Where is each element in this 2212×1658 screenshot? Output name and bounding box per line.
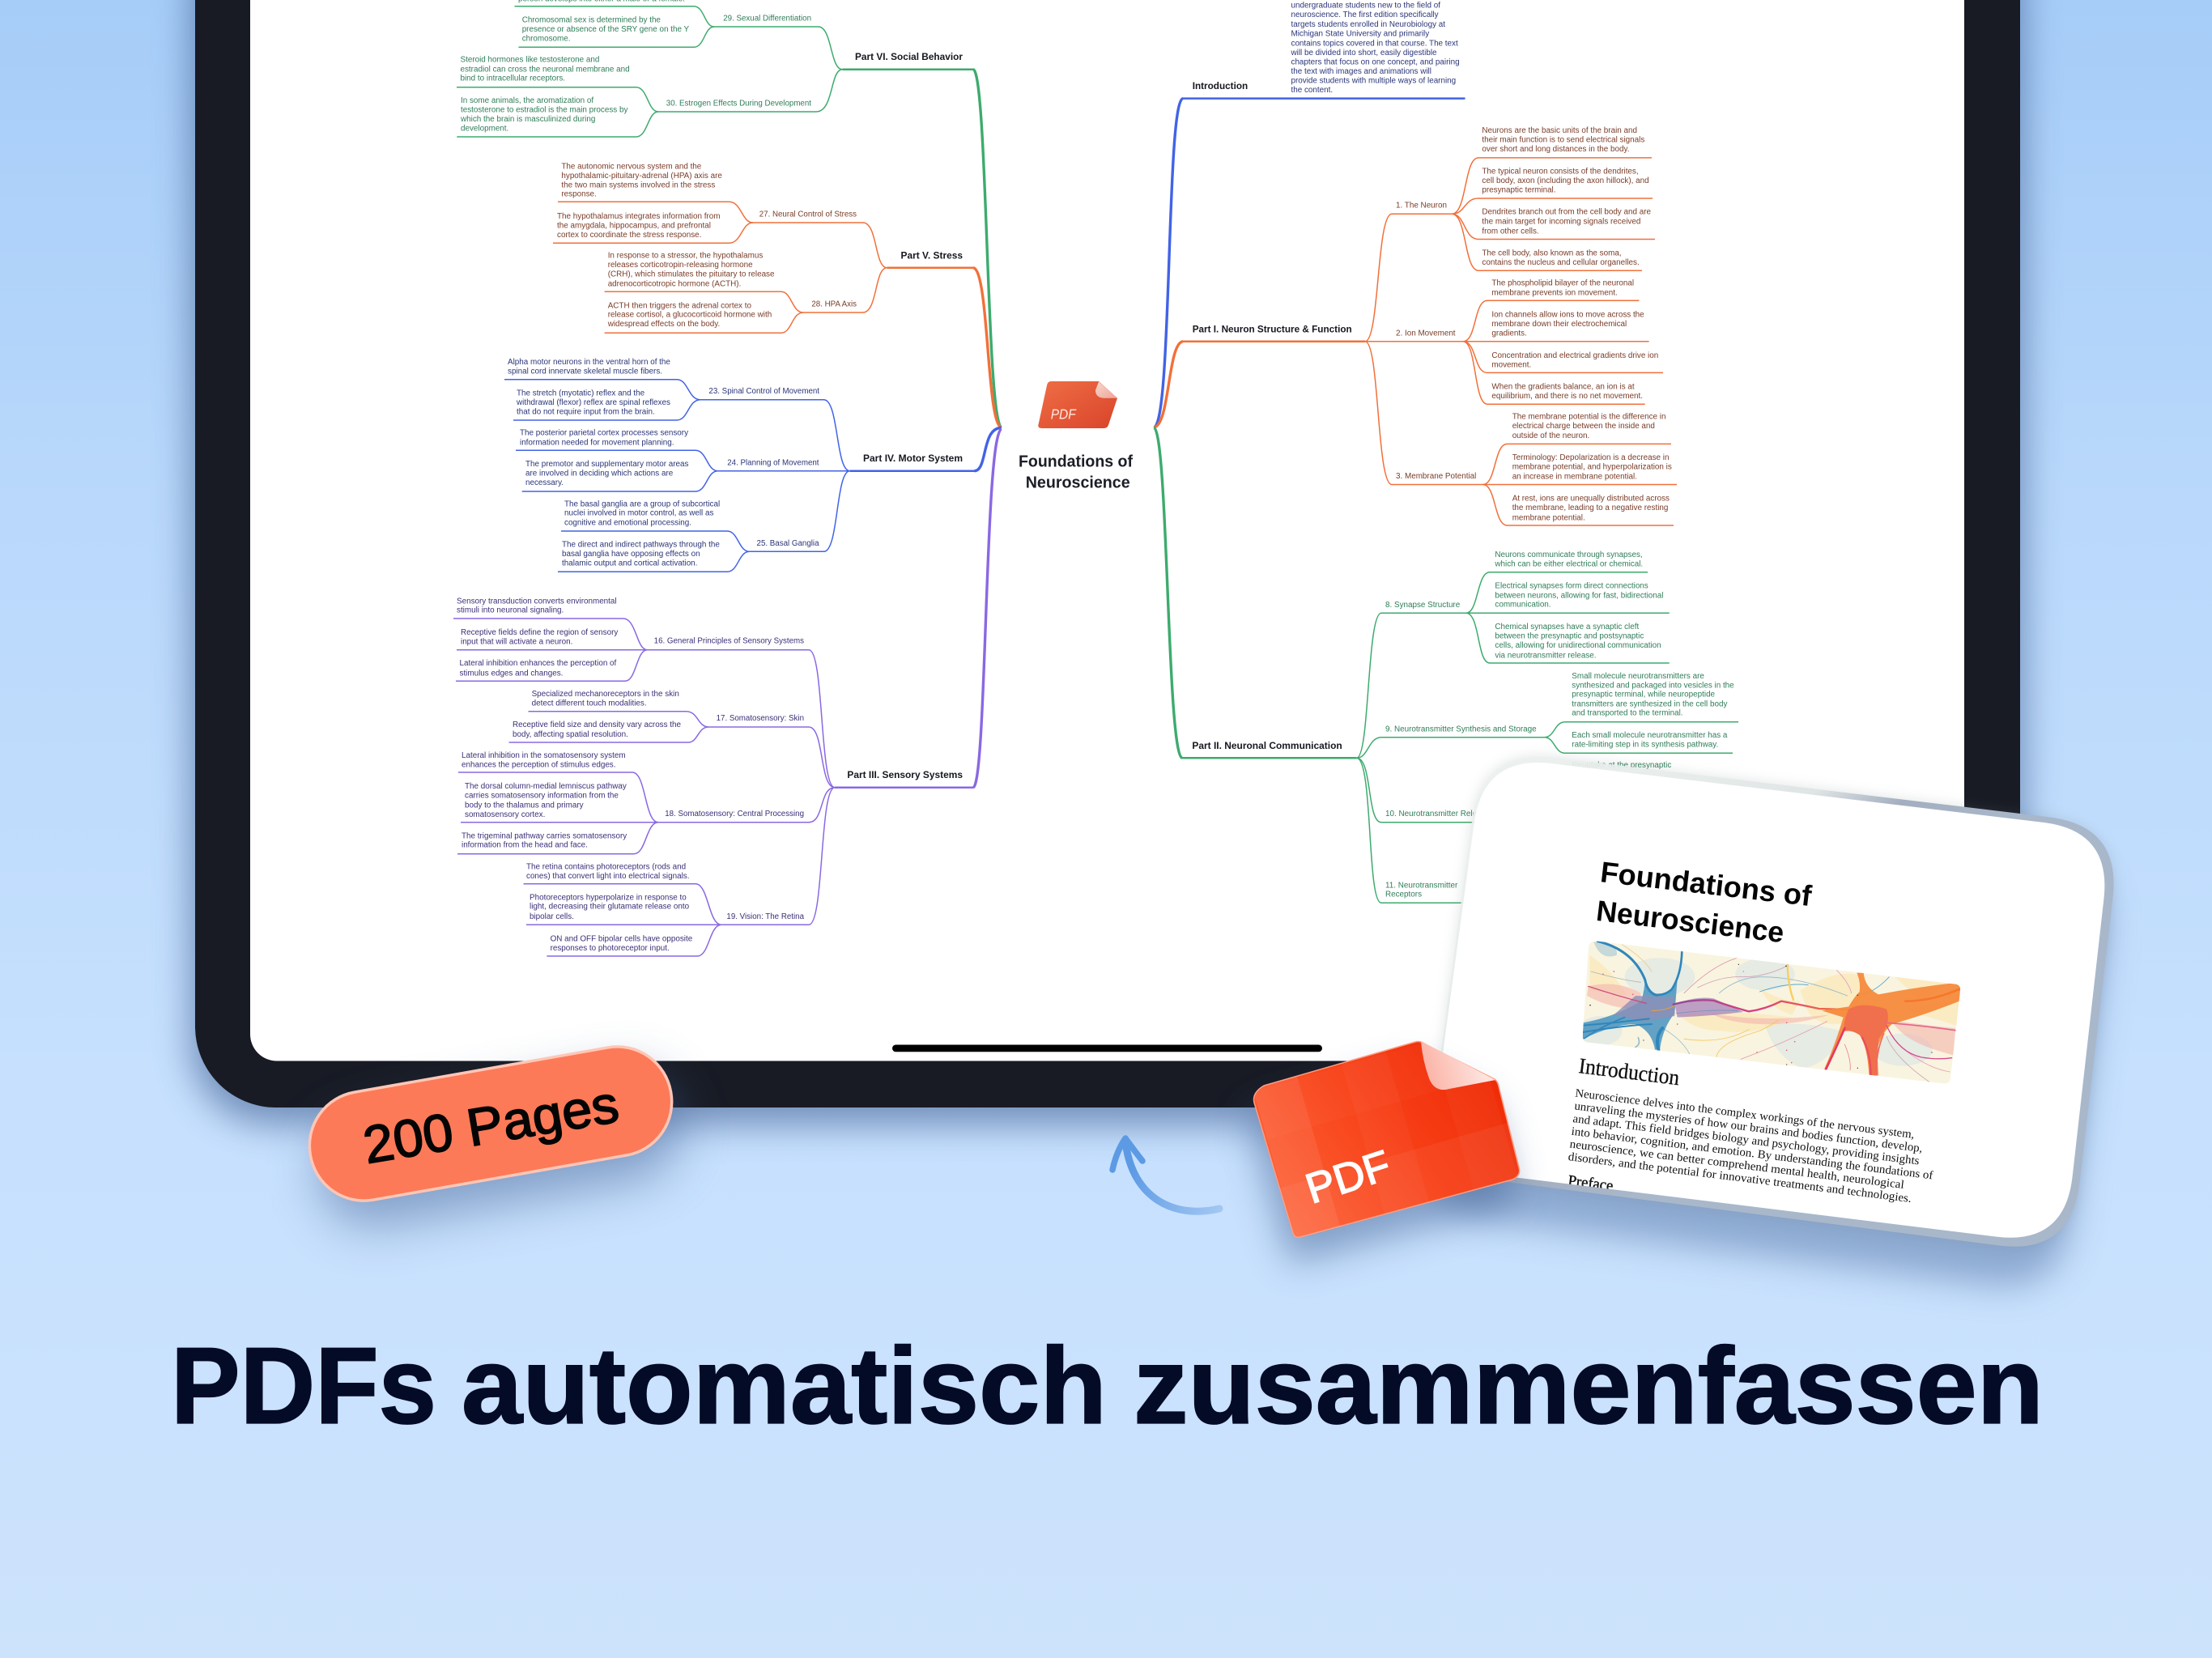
node: 1. The Neuron: Dendrites branch out from the cell body and are [1482, 208, 1651, 217]
folded corner [1421, 1041, 1495, 1090]
node: 2. Ion Movement: gradients. [1491, 329, 1527, 338]
PDF document card [1434, 757, 2114, 1247]
node: 1. The Neuron: over short and long distances in the body. [1482, 145, 1629, 154]
central topic [1019, 381, 1133, 491]
branch: Introduction: Introduction [1193, 80, 1248, 91]
node: 8. Synapse Structure [1357, 551, 1670, 758]
node: 8. Synapse Structure: Neurons communicate through synapses, [1495, 551, 1643, 559]
branch: Introduction: the content. [1291, 86, 1333, 95]
node: 2. Ion Movement: membrane prevents ion movement. [1491, 288, 1618, 298]
node: 24. Planning of Movement: 24. Planning of Movement [727, 458, 819, 467]
node: 2. Ion Movement: The phospholipid bilayer of the neuronal [1491, 279, 1634, 288]
node: 3. Membrane Potential: 3. Membrane Potential [1396, 472, 1476, 481]
node: 16. General Principles of Sensory Systems: stimuli into neuronal signaling. [457, 606, 564, 615]
node: 28. HPA Axis: 28. HPA Axis [811, 300, 857, 309]
node: 25. Basal Ganglia: thalamic output and cortical activation. [562, 559, 697, 568]
node: 25. Basal Ganglia: 25. Basal Ganglia [757, 539, 819, 548]
node: 9. Neurotransmitter Synthesis and Storage: and transported to the terminal. [1572, 709, 1683, 718]
node: 17. Somatosensory: Skin: detect different touch modalities. [532, 699, 647, 708]
card face [1436, 763, 2104, 1238]
node: 18. Somatosensory: Central Processing: The dorsal column-medial lemniscus pathway [465, 782, 627, 791]
node: 19. Vision: The Retina: Photoreceptors hyperpolarize in response to [530, 893, 687, 902]
node: 19. Vision: The Retina: 19. Vision: The Retina [726, 912, 805, 921]
node: 18. Somatosensory: Central Processing: The trigeminal pathway carries somatosensory [462, 831, 627, 840]
node: 27. Neural Control of Stress: hypothalamic-pituitary-adrenal (HPA) axis are [561, 172, 722, 181]
card body text [1567, 1087, 1938, 1208]
node: 16. General Principles of Sensory Systems: Receptive fields define the region of sensory [461, 628, 618, 637]
node: 1. The Neuron: contains the nucleus and cellular organelles. [1482, 258, 1640, 267]
node: 1. The Neuron: their main function is to send electrical signals [1482, 136, 1644, 144]
node: 8. Synapse Structure: communication. [1495, 601, 1551, 610]
mind map [453, 0, 1738, 956]
node: 23. Spinal Control of Movement: Alpha motor neurons in the ventral horn of the [508, 358, 670, 367]
central title [1019, 453, 1133, 491]
card body text: Neuroscience delves into the complex workings of the nervous system, [1575, 1087, 1915, 1141]
node: 30. Estrogen Effects During Development: development. [461, 124, 508, 133]
node: 8. Synapse Structure: via neurotransmitter release. [1495, 651, 1597, 660]
node: 3. Membrane Potential: The membrane potential is the difference in [1512, 413, 1665, 422]
badge: 200 Pages [301, 1038, 688, 1235]
node: 18. Somatosensory: Central Processing: information from the head and face. [462, 841, 588, 850]
tablet frame [195, 0, 2020, 1107]
node: 30. Estrogen Effects During Development: which the brain is masculinized during [460, 115, 595, 124]
node: 23. Spinal Control of Movement: spinal cord innervate skeletal muscle fibers. [508, 367, 662, 376]
node: 8. Synapse Structure: 8. Synapse Structure [1385, 601, 1461, 610]
node: 29. Sexual Differentiation: chromosome. [522, 34, 571, 44]
branch: Part II. Neuronal Communication [1154, 427, 1738, 903]
card illustration: neurons [1582, 941, 1961, 1083]
node: 1. The Neuron: from other cells. [1482, 227, 1539, 236]
node: 18. Somatosensory: Central Processing [457, 751, 835, 854]
branch: Introduction: contains topics covered in that course. The text [1291, 39, 1458, 48]
node: 16. General Principles of Sensory Systems: input that will activate a neuron. [461, 638, 572, 647]
node: 9. Neurotransmitter Synthesis and Storage: Small molecule neurotransmitters are [1572, 672, 1704, 681]
card body text: and adapt. This field bridges biology and psychology, providing insights [1572, 1112, 1921, 1168]
node: 24. Planning of Movement: information needed for movement planning. [520, 438, 674, 447]
node: 23. Spinal Control of Movement: withdrawal (flexor) reflex are spinal reflexes [516, 398, 670, 407]
card shadow below [1431, 889, 2121, 1304]
branch: Introduction: provide students with multiple ways of learning [1291, 76, 1456, 85]
node: 24. Planning of Movement: The posterior parietal cortex processes sensory [520, 428, 688, 437]
node: 18. Somatosensory: Central Processing: enhances the perception of stimulus edges. [462, 760, 615, 769]
node: 27. Neural Control of Stress: The autonomic nervous system and the [561, 162, 702, 171]
node: 9. Neurotransmitter Synthesis and Storage: rate-limiting step in its synthesis pathway. [1572, 741, 1718, 750]
node: 28. HPA Axis: ACTH then triggers the adrenal cortex to [608, 301, 751, 310]
pink washes [1587, 984, 1955, 1055]
node: 3. Membrane Potential: membrane potential. [1512, 513, 1585, 522]
node: 3. Membrane Potential: the membrane, leading to a negative resting [1512, 504, 1668, 512]
node: 2. Ion Movement: Concentration and electrical gradients drive ion [1491, 351, 1658, 360]
node: 3. Membrane Potential: outside of the neuron. [1512, 432, 1589, 440]
node: 2. Ion Movement: movement. [1491, 360, 1531, 369]
node: 30. Estrogen Effects During Development: estradiol can cross the neuronal membrane and [460, 65, 630, 74]
icon: large PDF file [1236, 1041, 1534, 1278]
node: 29. Sexual Differentiation: Chromosomal sex is determined by the [522, 16, 661, 24]
branch: Part V. Stress [553, 162, 1002, 427]
node: 9. Neurotransmitter Synthesis and Storage: 9. Neurotransmitter Synthesis and Storage [1385, 725, 1537, 733]
branch: Part VI. Social Behavior [457, 0, 1002, 427]
node: 8. Synapse Structure: Chemical synapses have a synaptic cleft [1495, 623, 1639, 631]
node: 8. Synapse Structure: between the presynaptic and postsynaptic [1495, 632, 1644, 641]
branch: Part III. Sensory Systems: Part III. Sensory Systems [847, 769, 963, 780]
node: 17. Somatosensory: Skin: body, affecting spatial resolution. [513, 730, 628, 739]
node: 27. Neural Control of Stress: the two main systems involved in the stress [561, 181, 715, 189]
node: 2. Ion Movement [1365, 279, 1663, 404]
headline: PDFs [171, 1326, 436, 1447]
node: 29. Sexual Differentiation [515, 0, 842, 70]
node: 3. Membrane Potential: Terminology: Depolarization is a decrease in [1512, 453, 1669, 462]
node: 19. Vision: The Retina: The retina contains photoreceptors (rods and [526, 862, 686, 871]
node: 3. Membrane Potential: membrane potential, and hyperpolarization is [1512, 463, 1672, 471]
node: 10. Neurotransmitter Release: 10. Neurotransmitter Release [1385, 810, 1490, 818]
branch: Introduction: undergraduate students new to the field of [1291, 2, 1440, 11]
node: 16. General Principles of Sensory Systems: Lateral inhibition enhances the perception of [460, 659, 617, 668]
node: 25. Basal Ganglia: The direct and indirect pathways through the [562, 541, 720, 550]
card soft shadow [1434, 757, 2114, 1247]
card heading: Preface: Preface [1567, 1172, 1614, 1195]
branch: Introduction: the text with images and animations will [1291, 67, 1431, 76]
node: 25. Basal Ganglia: basal ganglia have opposing effects on [562, 550, 700, 559]
card body text: disorders, and the potential for innovative treatments and technologies. [1568, 1150, 1912, 1205]
node: 16. General Principles of Sensory Systems [453, 597, 835, 788]
node: 24. Planning of Movement [516, 428, 850, 491]
node: 25. Basal Ganglia: cognitive and emotional processing. [564, 518, 691, 527]
node: 9. Neurotransmitter Synthesis and Storage: transmitters are synthesized in the cell body [1572, 699, 1727, 708]
branch: Part III. Sensory Systems [453, 429, 1002, 956]
node: 1. The Neuron: The typical neuron consists of the dendrites, [1482, 168, 1639, 176]
node: 27. Neural Control of Stress: response. [561, 190, 597, 199]
branch: Part VI. Social Behavior: Part VI. Social Behavior [855, 51, 963, 62]
node: 25. Basal Ganglia: The basal ganglia are a group of subcortical [564, 500, 720, 508]
branch: Introduction [1154, 2, 1465, 427]
branch: Introduction: Michigan State University and primarily [1291, 30, 1429, 39]
node: 30. Estrogen Effects During Development: testosterone to estradiol is the main process by [461, 105, 627, 114]
central title: Foundations of [1019, 453, 1133, 471]
node: 19. Vision: The Retina: bipolar cells. [530, 912, 574, 921]
node: 19. Vision: The Retina: responses to photoreceptor input. [551, 944, 670, 953]
axon and pink fibres [1674, 997, 1743, 1018]
node: 11. Neurotransmitter Receptors: 11. Neurotransmitter [1385, 881, 1458, 890]
card title [1594, 855, 1814, 949]
node: 28. HPA Axis: release cortisol, a glucocorticoid hormone with [608, 311, 772, 320]
node: 30. Estrogen Effects During Development: In some animals, the aromatization of [461, 96, 593, 105]
branch: Introduction: neuroscience. The first edition specifically [1291, 11, 1439, 19]
card heading: Introduction: Introduction [1577, 1053, 1681, 1090]
node: 17. Somatosensory: Skin: 17. Somatosensory: Skin [717, 714, 804, 723]
node: 1. The Neuron [1365, 126, 1655, 342]
node: 17. Somatosensory: Skin: Receptive field size and density vary across the [513, 721, 682, 729]
icon: small PDF file: PDF [1051, 406, 1077, 423]
node: 27. Neural Control of Stress: The hypothalamus integrates information from [557, 212, 720, 221]
card title: Neuroscience [1594, 894, 1786, 949]
branch: Part I. Neuron Structure & Function [1154, 126, 1677, 525]
node: 16. General Principles of Sensory Systems: 16. General Principles of Sensory Systems [654, 637, 804, 646]
branch: Part IV. Motor System [504, 358, 1002, 572]
node: 24. Planning of Movement: are involved in deciding which actions are [525, 469, 674, 478]
node: 9. Neurotransmitter Synthesis and Storage: synthesized and packaged into vesicles in the [1572, 681, 1734, 690]
node: 29. Sexual Differentiation: 29. Sexual Differentiation [723, 15, 811, 23]
node: 17. Somatosensory: Skin [509, 690, 835, 788]
node: 19. Vision: The Retina: light, decreasing their glutamate release onto [530, 903, 690, 912]
central title: Neuroscience [1026, 474, 1130, 491]
node: 19. Vision: The Retina [523, 788, 835, 956]
arrow [1112, 1138, 1219, 1211]
headline: automatisch [462, 1326, 1107, 1447]
node: 16. General Principles of Sensory Systems: Sensory transduction converts environmental [457, 597, 617, 606]
node: 29. Sexual Differentiation: presence or absence of the SRY gene on the Y [522, 25, 690, 34]
node: 2. Ion Movement: Ion channels allow ions to move across the [1491, 310, 1644, 319]
node: 8. Synapse Structure: Electrical synapses form direct connections [1495, 582, 1648, 591]
blue neuron [1593, 942, 1617, 956]
node: 18. Somatosensory: Central Processing: somatosensory cortex. [465, 810, 545, 819]
node: 30. Estrogen Effects During Development [457, 56, 842, 137]
node: 11. Neurotransmitter Receptors [1357, 758, 1474, 903]
node: 2. Ion Movement: membrane down their electrochemical [1491, 320, 1627, 329]
card title: Foundations of [1599, 855, 1814, 912]
node: 30. Estrogen Effects During Development: Steroid hormones like testosterone and [460, 56, 599, 65]
orange neuron [1822, 973, 1961, 1075]
home indicator [892, 1044, 1322, 1052]
node: 28. HPA Axis: In response to a stressor, the hypothalamus [608, 252, 763, 261]
node: 25. Basal Ganglia: nuclei involved in motor control, as well as [564, 509, 713, 518]
card body text: into behavior, cognition, and emotion. By understanding the foundations of [1571, 1125, 1933, 1183]
node: 8. Synapse Structure: cells, allowing for unidirectional communication [1495, 641, 1661, 650]
node: 1. The Neuron: Neurons are the basic units of the brain and [1482, 126, 1637, 135]
branch: Introduction: will be divided into short, easily digestible [1291, 49, 1437, 57]
node: 18. Somatosensory: Central Processing: body to the thalamus and primary [465, 801, 584, 810]
node: 27. Neural Control of Stress: the amygdala, hippocampus, and prefrontal [557, 221, 711, 230]
node: 28. HPA Axis [605, 252, 887, 333]
node: 28. HPA Axis: adrenocorticotropic hormone (ACTH). [608, 280, 741, 289]
node: 2. Ion Movement: 2. Ion Movement [1396, 329, 1456, 338]
thin fibres [1591, 945, 1950, 1082]
node: 17. Somatosensory: Skin: Specialized mechanoreceptors in the skin [532, 690, 679, 699]
node: 3. Membrane Potential [1365, 342, 1677, 525]
node: 3. Membrane Potential: an increase in membrane potential. [1512, 472, 1637, 481]
node: 27. Neural Control of Stress: 27. Neural Control of Stress [759, 210, 857, 219]
node: 25. Basal Ganglia [558, 471, 850, 572]
node: 18. Somatosensory: Central Processing: 18. Somatosensory: Central Processing [665, 810, 804, 818]
node: 11. Neurotransmitter Receptors: Receptors [1385, 891, 1422, 899]
branch: Part I. Neuron Structure & Function: Part I. Neuron Structure & Function [1193, 323, 1352, 334]
node: 10. Neurotransmitter Release [1357, 758, 1490, 823]
device shadow [190, 0, 2024, 1125]
card body text: neuroscience, we can better comprehend mental health, neurological [1569, 1137, 1905, 1192]
node: 28. HPA Axis: (CRH), which stimulates the pituitary to release [608, 270, 775, 278]
node: 9. Neurotransmitter Synthesis and Storage: Each small molecule neurotransmitter has a [1572, 731, 1728, 740]
node: 3. Membrane Potential: At rest, ions are unequally distributed across [1512, 495, 1670, 504]
badge: 200 Pages: 200 Pages [359, 1074, 623, 1175]
tablet screen [250, 0, 1964, 1061]
node: 1. The Neuron: cell body, axon (including the axon hillock), and [1482, 176, 1649, 185]
card edge [1434, 757, 2114, 1247]
node: 2. Ion Movement: equilibrium, and there is no net movement. [1491, 392, 1643, 401]
node: 8. Synapse Structure: which can be either electrical or chemical. [1494, 559, 1643, 568]
node: 23. Spinal Control of Movement: The stretch (myotatic) reflex and the [517, 389, 645, 398]
node: 9. Neurotransmitter Synthesis and Storage: Reuptake at the presynaptic [1572, 761, 1671, 770]
node: 23. Spinal Control of Movement: 23. Spinal Control of Movement [708, 387, 819, 396]
branch: Introduction: targets students enrolled in Neurobiology at [1291, 20, 1445, 29]
node: 9. Neurotransmitter Synthesis and Storage [1357, 672, 1738, 770]
node: 19. Vision: The Retina: cones) that convert light into electrical signals. [526, 872, 689, 881]
branch: Part IV. Motor System: Part IV. Motor System [863, 453, 963, 464]
node: 24. Planning of Movement: necessary. [525, 478, 564, 487]
node: 16. General Principles of Sensory Systems: stimulus edges and changes. [460, 669, 563, 678]
branch: Part II. Neuronal Communication: Part II. Neuronal Communication [1192, 740, 1342, 751]
node: 30. Estrogen Effects During Development: 30. Estrogen Effects During Development [666, 100, 811, 108]
node: 23. Spinal Control of Movement [504, 358, 850, 471]
branch: Part V. Stress: Part V. Stress [900, 249, 963, 261]
node: 28. HPA Axis: widespread effects on the body. [607, 320, 720, 329]
node: 1. The Neuron: the main target for incoming signals received [1482, 217, 1640, 227]
headline [171, 1326, 2044, 1447]
node: 3. Membrane Potential: electrical charge between the inside and [1512, 422, 1655, 431]
node: 18. Somatosensory: Central Processing: carries somatosensory information from the [465, 791, 619, 800]
node: 1. The Neuron: presynaptic terminal. [1482, 185, 1556, 194]
node: 24. Planning of Movement: The premotor and supplementary motor areas [525, 460, 689, 469]
card body text: unraveling the mysteries of how our brains and bodies function, develop, [1574, 1099, 1923, 1155]
node: 27. Neural Control of Stress [553, 162, 887, 268]
node: 9. Neurotransmitter Synthesis and Storage: presynaptic terminal, while neuropeptide [1572, 691, 1716, 699]
dots [1602, 971, 1795, 1063]
node: 28. HPA Axis: releases corticotropin-releasing hormone [608, 261, 753, 270]
node: 1. The Neuron: The cell body, also known as the soma, [1482, 249, 1622, 258]
node: 23. Spinal Control of Movement: that do not require input from the brain. [517, 408, 655, 417]
node: 30. Estrogen Effects During Development: bind to intracellular receptors. [460, 74, 565, 83]
icon: small PDF file [1038, 381, 1117, 428]
PDF label: PDF [1300, 1141, 1397, 1213]
node: 19. Vision: The Retina: ON and OFF bipolar cells have opposite [551, 935, 693, 944]
headline: zusammenfassen [1134, 1326, 2044, 1447]
node: 8. Synapse Structure: between neurons, allowing for fast, bidirectional [1495, 591, 1663, 600]
node: 1. The Neuron: 1. The Neuron [1396, 202, 1447, 210]
node: 2. Ion Movement: When the gradients balance, an ion is at [1491, 383, 1635, 392]
node: 27. Neural Control of Stress: cortex to coordinate the stress response. [557, 231, 701, 240]
branch: Introduction: chapters that focus on one concept, and pairing [1291, 58, 1460, 66]
node: 18. Somatosensory: Central Processing: Lateral inhibition in the somatosensory system [462, 751, 626, 760]
